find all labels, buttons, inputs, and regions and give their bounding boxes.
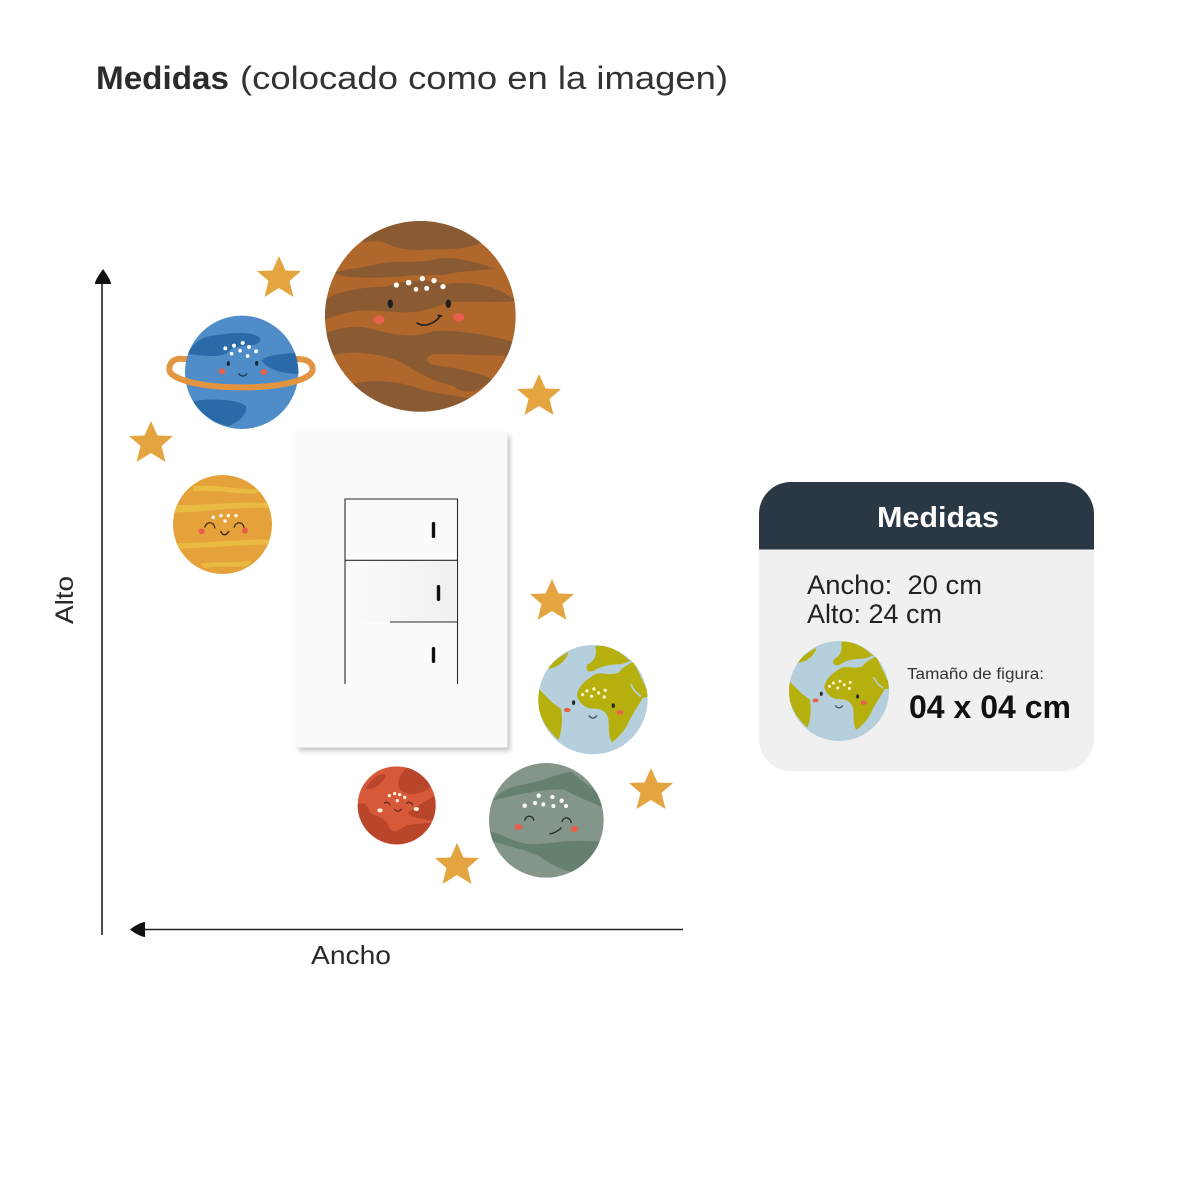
panel: medidas <box>759 482 1094 771</box>
title: (colocado como en la imagen) <box>240 60 728 96</box>
planet: Jupiter brown <box>323 216 517 416</box>
text: width: Ancho: 20 cm <box>807 570 982 600</box>
planet: red Mars <box>358 766 436 844</box>
stars <box>129 256 673 884</box>
panel header <box>759 482 1094 550</box>
planet: blue with ring <box>169 316 313 429</box>
planet: Earth <box>536 645 650 754</box>
panel heading: Medidas <box>877 502 999 534</box>
text: height: Alto: 24 cm <box>807 599 942 629</box>
title: Medidas <box>96 60 229 96</box>
light switch plate <box>296 432 510 751</box>
planet: orange Venus <box>171 475 276 574</box>
arrow: width axis <box>130 922 683 937</box>
text: figure size label: Tamaño de figura: <box>907 666 1044 683</box>
panel body <box>759 482 1094 771</box>
arrow: height axis <box>95 269 111 935</box>
icon: earth sticker <box>787 641 891 741</box>
label: Alto: Alto <box>51 576 79 624</box>
title <box>96 60 728 96</box>
label: Ancho: Ancho <box>311 940 391 970</box>
text: figure size value: 04 x 04 cm <box>909 689 1071 725</box>
planet: grey-green <box>487 763 604 878</box>
